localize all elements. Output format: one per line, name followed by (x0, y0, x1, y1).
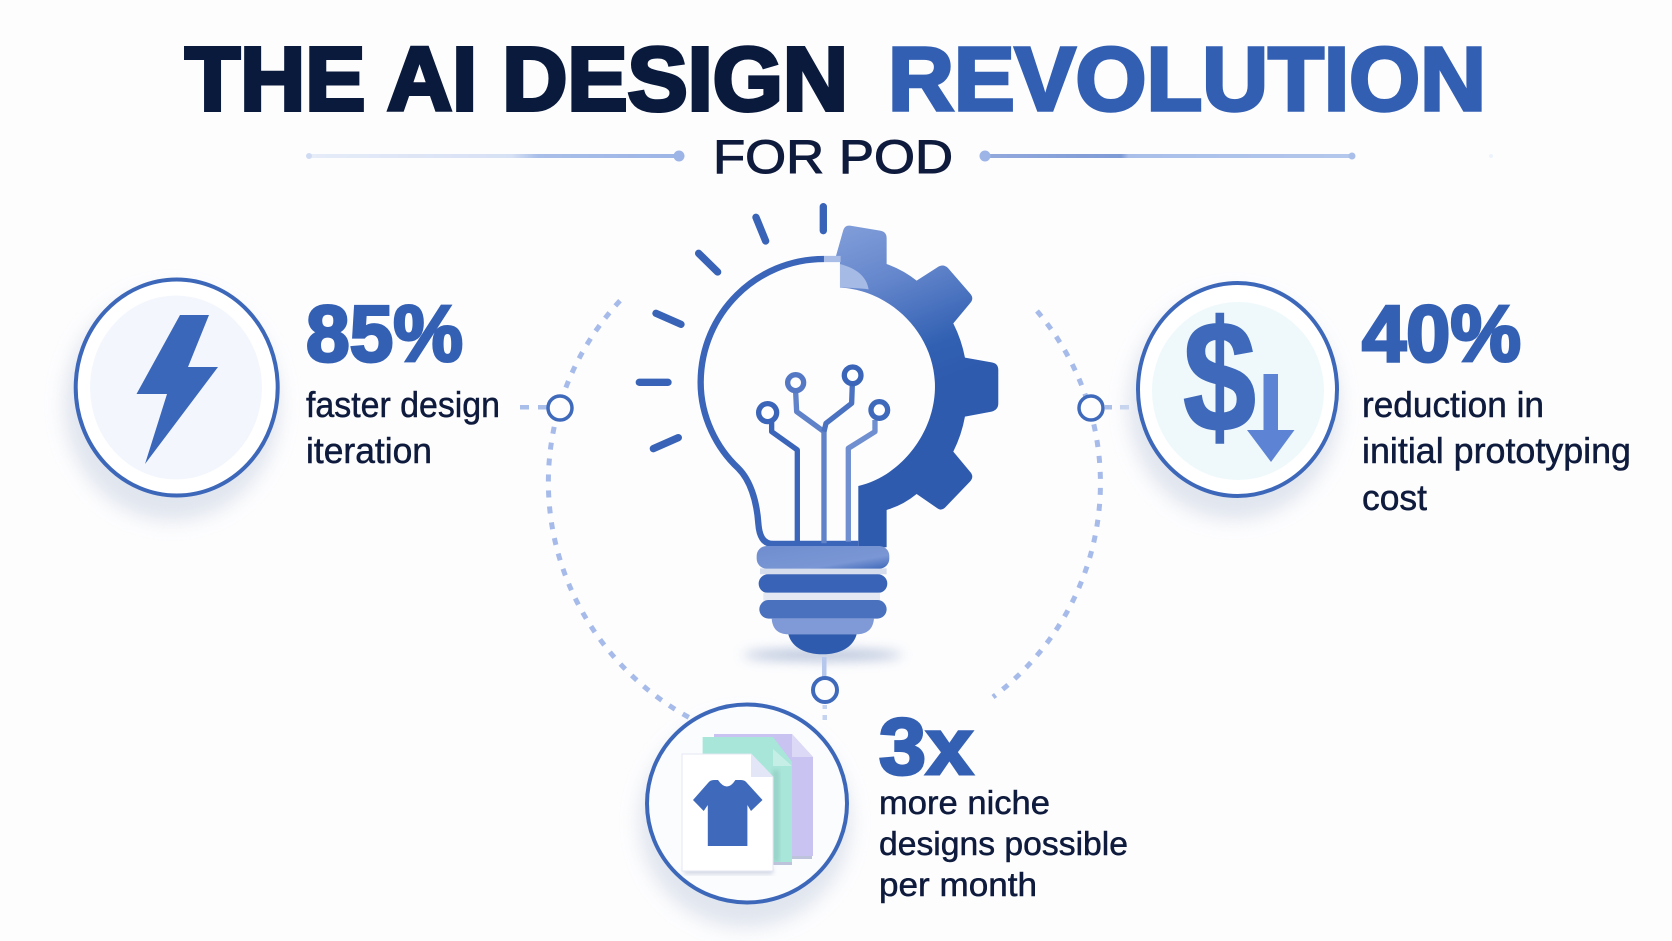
text: more niche designs possible per month: per month (879, 866, 1037, 903)
text: reduction in initial prototyping cost: initial prototyping (1362, 430, 1631, 471)
circle badge: dollar down (1128, 283, 1340, 520)
bulb outline (701, 259, 858, 544)
icon: lightning bolt (136, 315, 218, 464)
circle badge: lightning (64, 280, 280, 521)
icon: purple page (714, 734, 813, 856)
light rays (639, 207, 823, 449)
subtitle (306, 130, 1493, 183)
icon: down arrow (1247, 374, 1294, 462)
text: faster design iteration (306, 384, 500, 471)
circle badge: stacked tee designs (639, 704, 851, 928)
gear (836, 226, 998, 547)
text: more niche designs possible per month: designs possible (879, 825, 1128, 862)
title (185, 30, 1486, 130)
text: reduction in initial prototyping cost (1362, 384, 1631, 518)
text: faster design iteration: faster design (306, 384, 500, 425)
gear highlight (840, 264, 869, 289)
stat: 40%: 40% (1362, 289, 1521, 378)
panel: 40% reduction in cost (1128, 283, 1631, 520)
base shadow (743, 650, 903, 660)
title: REVOLUTION (888, 30, 1486, 130)
dashed ring: right arc (993, 311, 1100, 697)
icon: dollar sign: $ (1183, 289, 1256, 465)
text: reduction in initial prototyping cost: cost (1362, 477, 1427, 518)
title: THE AI DESIGN (185, 30, 848, 130)
circuit traces (772, 385, 875, 543)
stat: 3x: 3x (879, 702, 973, 791)
icon: t-shirt (693, 780, 762, 846)
connector: bulb to bottom node (813, 657, 837, 720)
icon: lightbulb with gear (639, 207, 998, 660)
connector: left node (520, 396, 572, 420)
connector: right node (1079, 396, 1129, 420)
bulb screw base (760, 568, 887, 574)
panel: 3x more niche designs (639, 702, 1128, 928)
text: faster design iteration: iteration (306, 430, 432, 471)
text: more niche designs possible per month (879, 784, 1128, 903)
icon: white page (684, 868, 773, 874)
panel: 85% faster design iteration (64, 280, 500, 521)
icon: green page (703, 737, 792, 862)
text: more niche designs possible per month: more niche (879, 784, 1050, 821)
dashed ring: left arc (548, 301, 690, 718)
stat: 85%: 85% (306, 289, 463, 378)
text: reduction in initial prototyping cost: reduction in (1362, 384, 1544, 425)
subtitle: FOR POD (713, 130, 953, 183)
circuit nodes (759, 367, 888, 422)
